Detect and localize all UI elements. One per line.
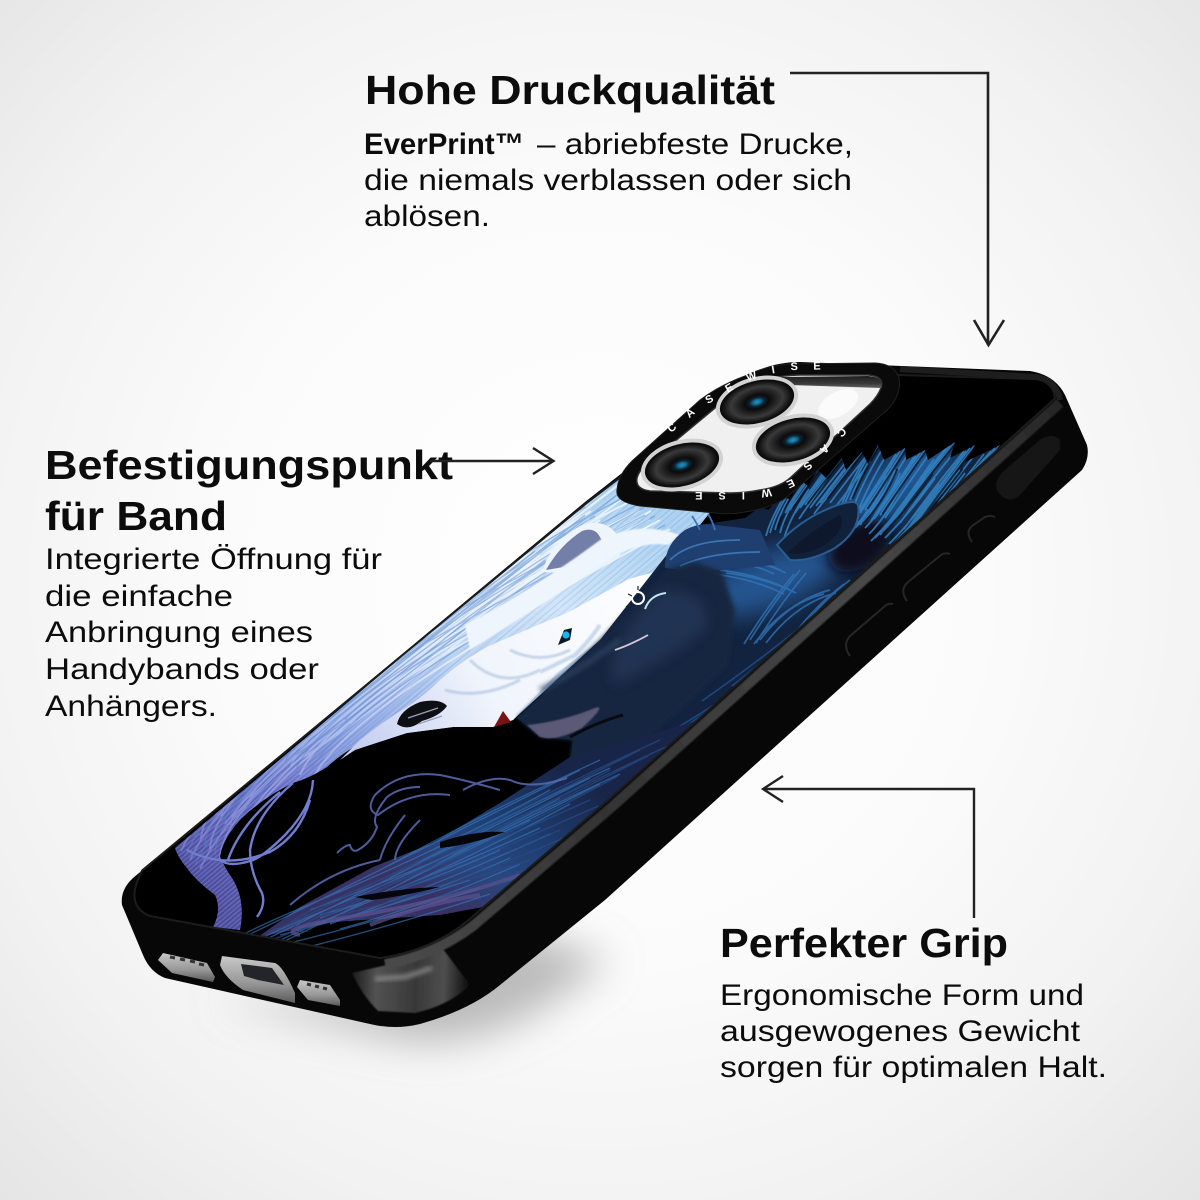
description: Handybands oder — [45, 653, 319, 686]
sun and moon mark — [626, 586, 666, 609]
arrow: grip — [763, 776, 974, 918]
description — [720, 979, 1107, 1084]
dark lion mane — [517, 442, 1000, 876]
tuft strands — [670, 514, 760, 566]
callout: grip — [720, 920, 1107, 1084]
dark lion ear — [777, 502, 859, 560]
description: ablösen. — [364, 200, 490, 233]
black gap in hair — [355, 832, 505, 900]
phone case — [122, 362, 1088, 1027]
description: Integrierte Öffnung für — [45, 543, 382, 576]
mouth teeth — [408, 708, 442, 724]
muzzle — [527, 707, 599, 738]
hair wisps — [290, 774, 567, 905]
description: sorgen für optimalen Halt. — [720, 1051, 1107, 1084]
bottom speaker left — [158, 953, 215, 982]
camera island: CASEWISE — [668, 362, 820, 432]
white lion eye — [558, 628, 572, 645]
charging port — [220, 956, 295, 1003]
brand top — [671, 369, 838, 433]
lower right lip highlight — [385, 403, 1060, 964]
description: Anbringung eines — [45, 616, 313, 649]
camera flash — [813, 383, 863, 425]
white lion mouth — [397, 701, 447, 727]
bottom speaker right — [297, 980, 340, 1006]
white lion hair sweep — [465, 529, 680, 650]
lower flowing hair — [246, 722, 694, 946]
top right lip highlight — [900, 369, 1060, 400]
heading — [45, 442, 453, 539]
heading: für Band — [45, 493, 227, 539]
description: Anhängers. — [45, 690, 217, 723]
description: Ergonomische Form und — [720, 979, 1084, 1012]
case silhouette — [122, 362, 1088, 1027]
description — [45, 543, 382, 723]
white lion ear — [542, 523, 620, 573]
camera island: CASEWISE — [696, 428, 846, 500]
gloss highlight — [375, 968, 432, 979]
description: die niemals verblassen oder sich — [364, 164, 852, 197]
mouth line — [570, 715, 623, 737]
camera window — [637, 375, 882, 493]
heading: Befestigungspunkt — [45, 442, 453, 488]
closed eye — [615, 635, 648, 650]
phone shadow — [215, 930, 610, 1042]
callout: print quality — [364, 67, 853, 233]
glossy lower corner — [352, 945, 470, 1013]
heading: Perfekter Grip — [720, 920, 1008, 966]
dark lion forehead tuft — [665, 524, 775, 572]
eye iris — [562, 631, 570, 639]
lens left — [635, 430, 729, 500]
description — [364, 128, 853, 233]
dark lion face — [517, 562, 735, 762]
lens right — [746, 405, 840, 475]
white lion face — [340, 570, 667, 760]
side grip bump — [996, 436, 1060, 499]
white lion mane — [175, 480, 710, 930]
description: die einfache — [45, 580, 233, 613]
island frame — [617, 363, 900, 514]
arrow: strap mount — [430, 448, 554, 474]
description: ausgewogenes Gewicht — [720, 1015, 1081, 1048]
window top rim — [780, 376, 882, 388]
heading: Hohe Druckqualität — [365, 67, 775, 113]
side buttons — [846, 516, 995, 656]
mane loose strands — [187, 780, 313, 917]
mane bright areas — [716, 532, 846, 630]
arrow: print quality — [790, 73, 1004, 345]
callout: strap mount — [45, 442, 453, 723]
description: EverPrint™ — [364, 128, 524, 161]
brand bottom — [672, 427, 842, 492]
lip — [135, 372, 1054, 957]
lens top — [710, 367, 804, 437]
back print artwork — [136, 376, 1054, 957]
description: – abriebfeste Drucke, — [537, 128, 853, 161]
nose — [494, 711, 511, 727]
camera island — [616, 362, 900, 514]
